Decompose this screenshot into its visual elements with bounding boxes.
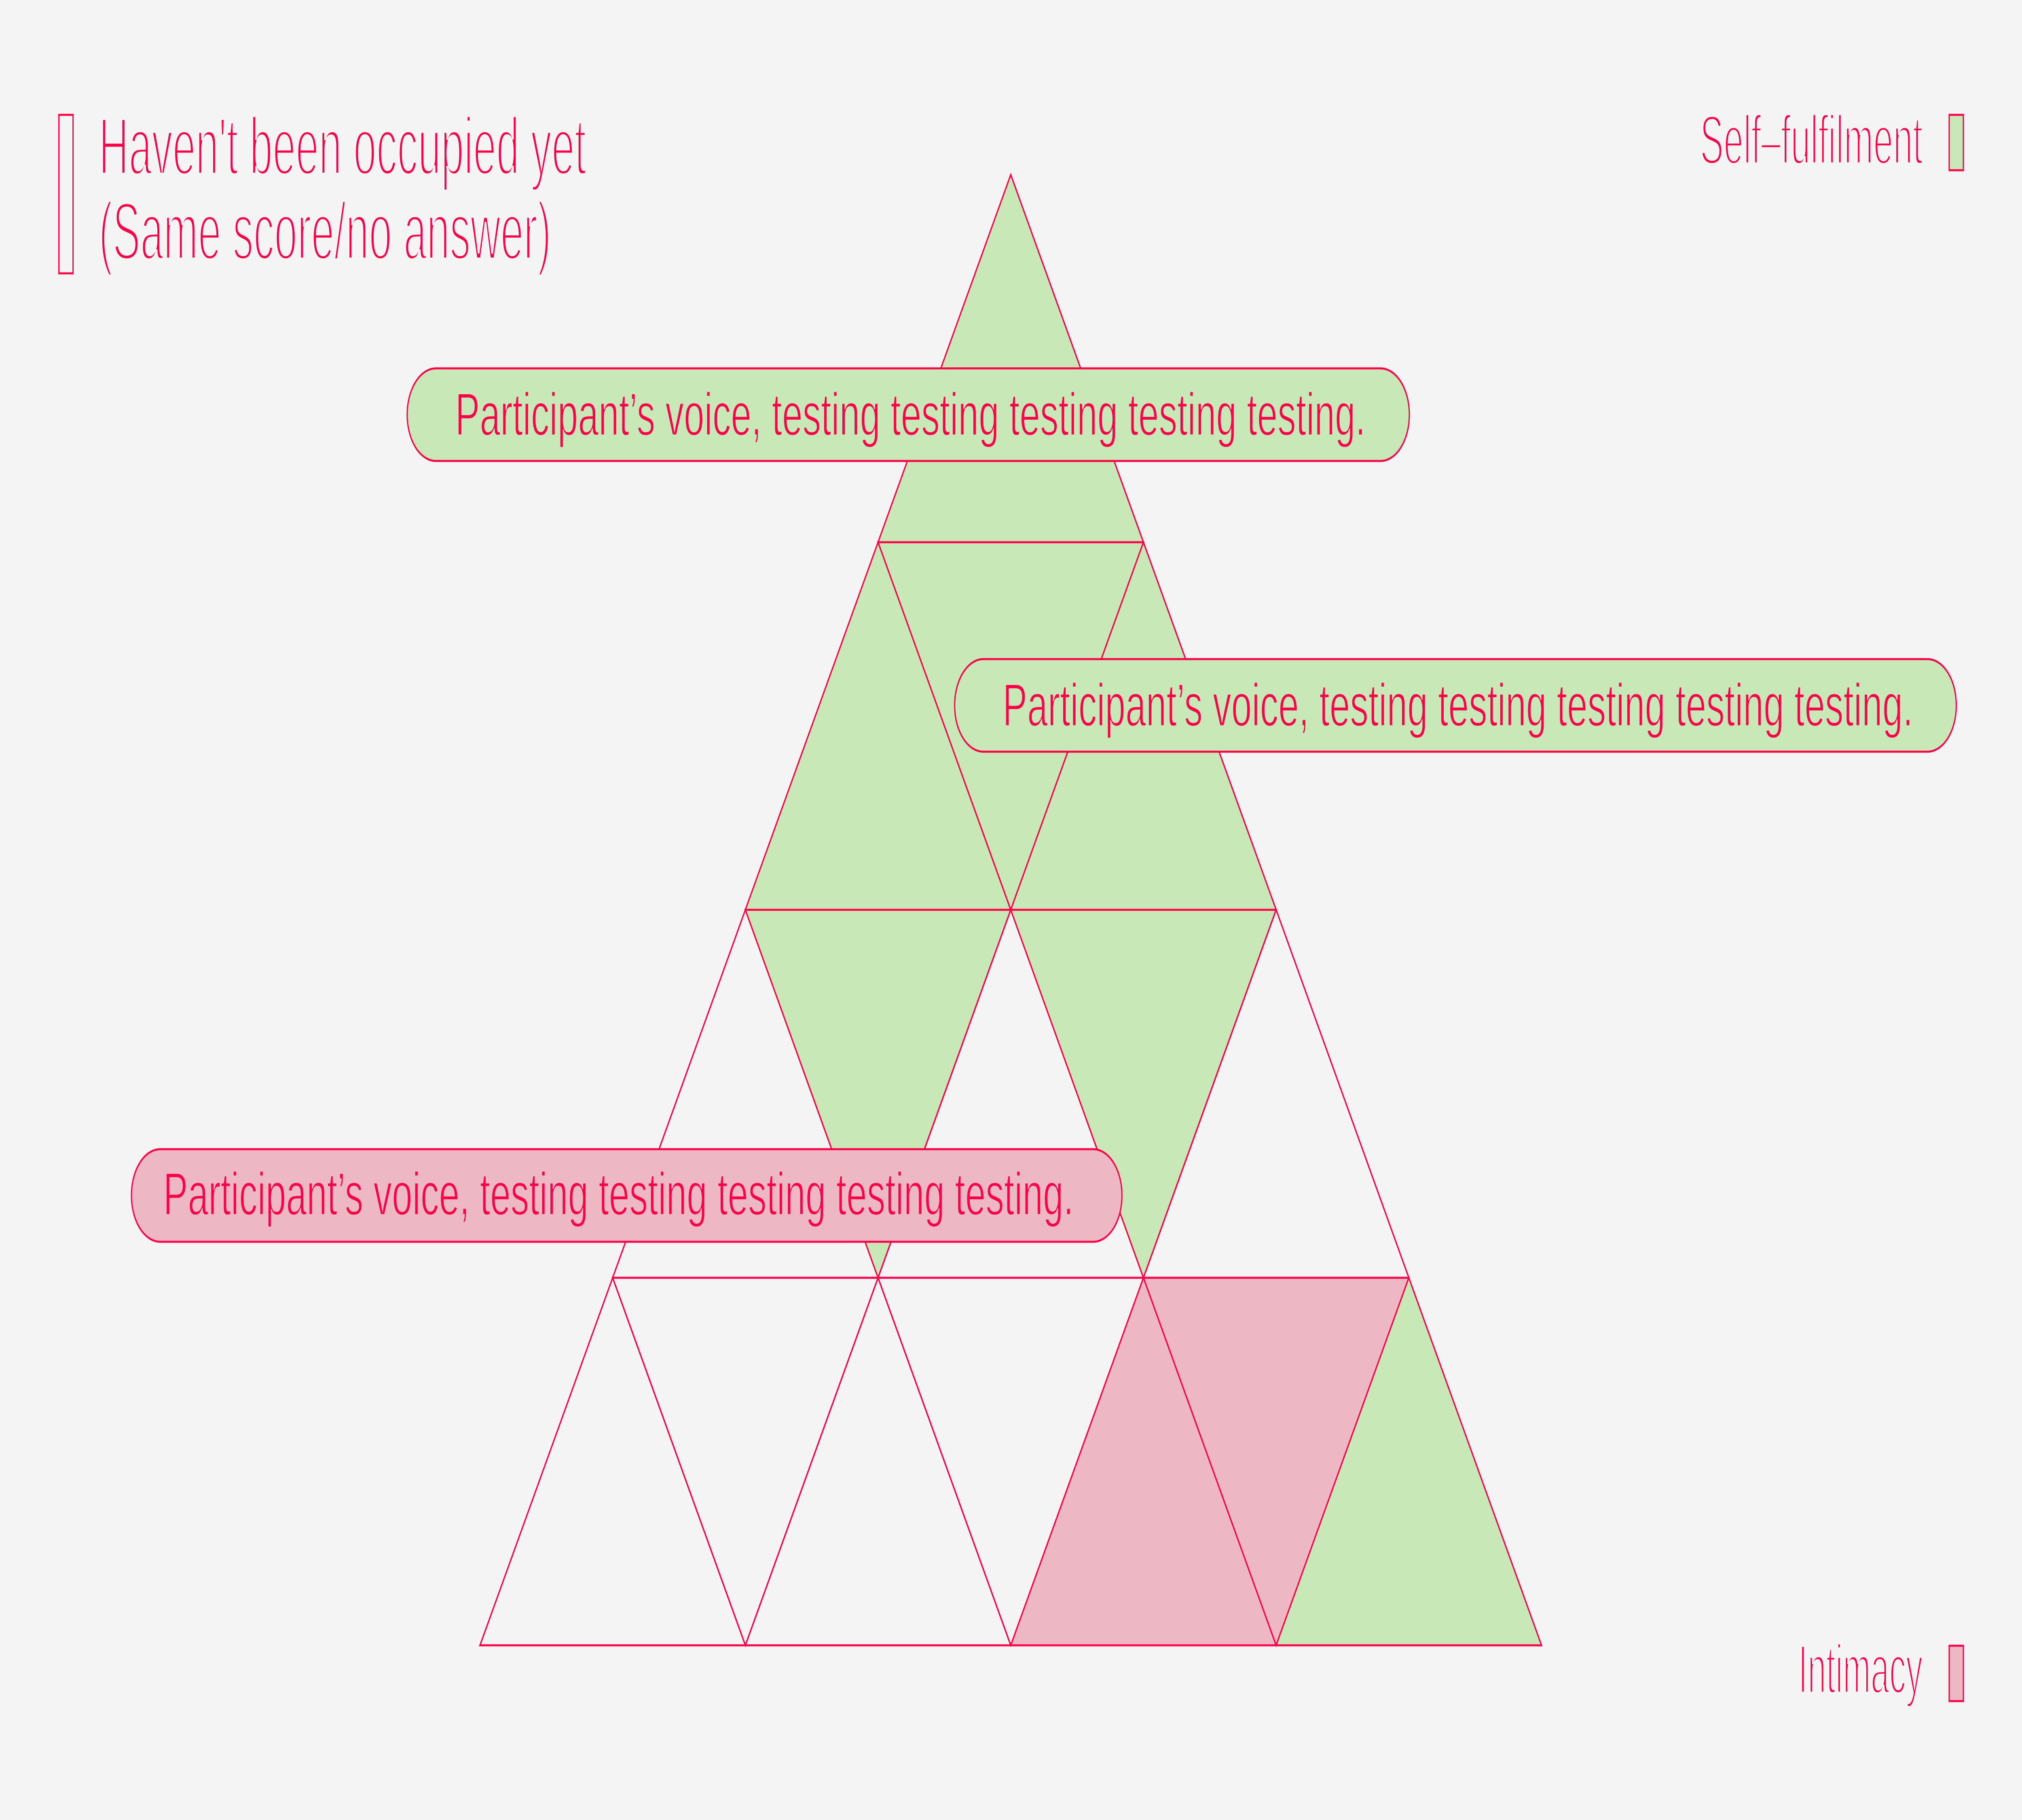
callout: participant voice, top xyxy=(407,368,1409,461)
row 3 triangle 4: green xyxy=(1011,910,1276,1278)
legend text: self-fulfilment: Self–fulfilment xyxy=(1700,101,1923,179)
legend: self-fulfilment xyxy=(1700,101,1963,179)
row 4 triangle 5: pink xyxy=(1011,1278,1276,1645)
row 3 triangle 1: empty xyxy=(613,910,878,1278)
row 3 triangle 3: empty xyxy=(878,910,1144,1278)
callout: participant voice, lower left xyxy=(131,1149,1122,1242)
row 1 apex triangle: green xyxy=(878,175,1144,542)
legend text: not yet occupied: (Same score/no answer) xyxy=(99,186,551,277)
legend swatch: empty xyxy=(59,115,73,273)
row 4 triangle 6: pink xyxy=(1144,1278,1409,1645)
row 2 left triangle: green xyxy=(745,542,1011,910)
triangle grid pyramid xyxy=(480,175,1542,1645)
callout: participant voice, middle right: Participant’s voice, testing testing testing testing testing. xyxy=(1003,672,1913,739)
callout: participant voice, lower left: Participant’s voice, testing testing testing testing testing. xyxy=(163,1161,1074,1228)
row 3 triangle 5: empty xyxy=(1144,910,1409,1278)
row 2 right triangle: green xyxy=(1011,542,1276,910)
row 3 triangle 2: green xyxy=(745,910,1011,1278)
legend swatch: pink xyxy=(1949,1646,1963,1701)
legend: not yet occupied xyxy=(59,101,586,277)
row 4 triangle 2: empty xyxy=(613,1278,878,1645)
row 4 triangle 4: empty xyxy=(878,1278,1144,1645)
callout: participant voice, top: Participant’s voice, testing testing testing testing testing. xyxy=(455,381,1366,448)
legend text: not yet occupied xyxy=(99,101,586,277)
legend swatch: green xyxy=(1949,115,1963,170)
row 4 triangle 3: empty xyxy=(745,1278,1011,1645)
row 4 triangle 1: empty xyxy=(480,1278,745,1645)
row 2 centre triangle: green xyxy=(878,542,1144,910)
legend text: not yet occupied: Haven't been occupied yet xyxy=(99,101,586,192)
row 4 triangle 7: green xyxy=(1276,1278,1542,1645)
legend: intimacy xyxy=(1798,1631,1963,1708)
legend text: intimacy: Intimacy xyxy=(1798,1631,1923,1708)
callout: participant voice, middle right xyxy=(955,659,1956,752)
